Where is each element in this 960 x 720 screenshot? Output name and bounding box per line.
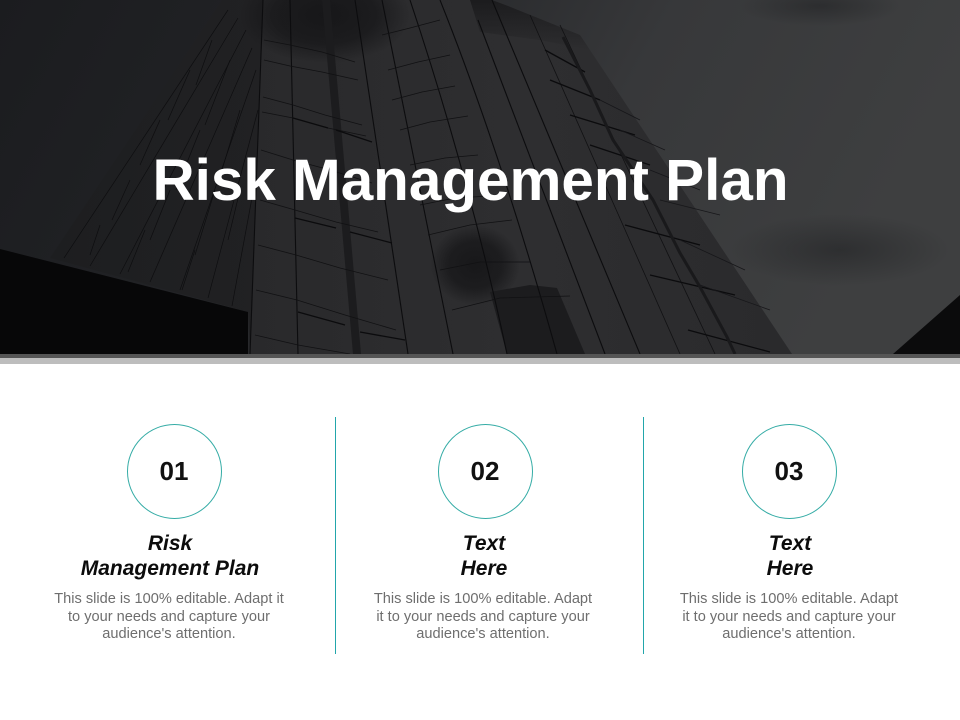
- header band underline: [0, 354, 960, 358]
- body text 1: audience's attention.: [102, 626, 236, 642]
- body text 3: [680, 591, 898, 642]
- number 03: 03: [775, 456, 803, 486]
- heading 2: Here: [461, 557, 507, 580]
- number circle 01: [127, 424, 222, 519]
- body text 2: [374, 591, 592, 642]
- divider 1: [335, 417, 336, 654]
- heading 1: [81, 532, 259, 580]
- hero photo: dark office tower against cloudy sky: [0, 0, 960, 354]
- dark foreground block, lower left: [0, 249, 248, 354]
- body text 2: This slide is 100% editable. Adapt: [374, 591, 592, 607]
- building side face: [50, 0, 263, 354]
- body text 1: to your needs and capture your: [68, 608, 270, 624]
- number circle 03: [742, 424, 837, 519]
- column 3: [680, 424, 898, 642]
- heading 2: Text: [463, 532, 505, 555]
- body text 2: it to your needs and capture your: [376, 608, 590, 624]
- dark foreground building, lower right: [893, 295, 960, 354]
- building front face: [240, 0, 792, 354]
- divider 2: [643, 417, 644, 654]
- body text 3: it to your needs and capture your: [682, 608, 896, 624]
- body text 2: audience's attention.: [416, 626, 550, 642]
- number 01: 01: [160, 456, 188, 486]
- title: Risk Management Plan: [152, 148, 788, 213]
- heading 3: Here: [767, 557, 813, 580]
- body text 3: audience's attention.: [722, 626, 856, 642]
- heading 2: [461, 532, 507, 580]
- heading 1: Risk: [148, 532, 192, 555]
- heading 3: [767, 532, 813, 580]
- number 02: 02: [471, 456, 499, 486]
- body text 1: This slide is 100% editable. Adapt it: [54, 591, 284, 607]
- heading 1: Management Plan: [81, 557, 259, 580]
- body text 1: [54, 591, 284, 642]
- body text 3: This slide is 100% editable. Adapt: [680, 591, 898, 607]
- number circle 02: [438, 424, 533, 519]
- heading 3: Text: [769, 532, 811, 555]
- column 1: [54, 424, 284, 642]
- column 2: [374, 424, 592, 642]
